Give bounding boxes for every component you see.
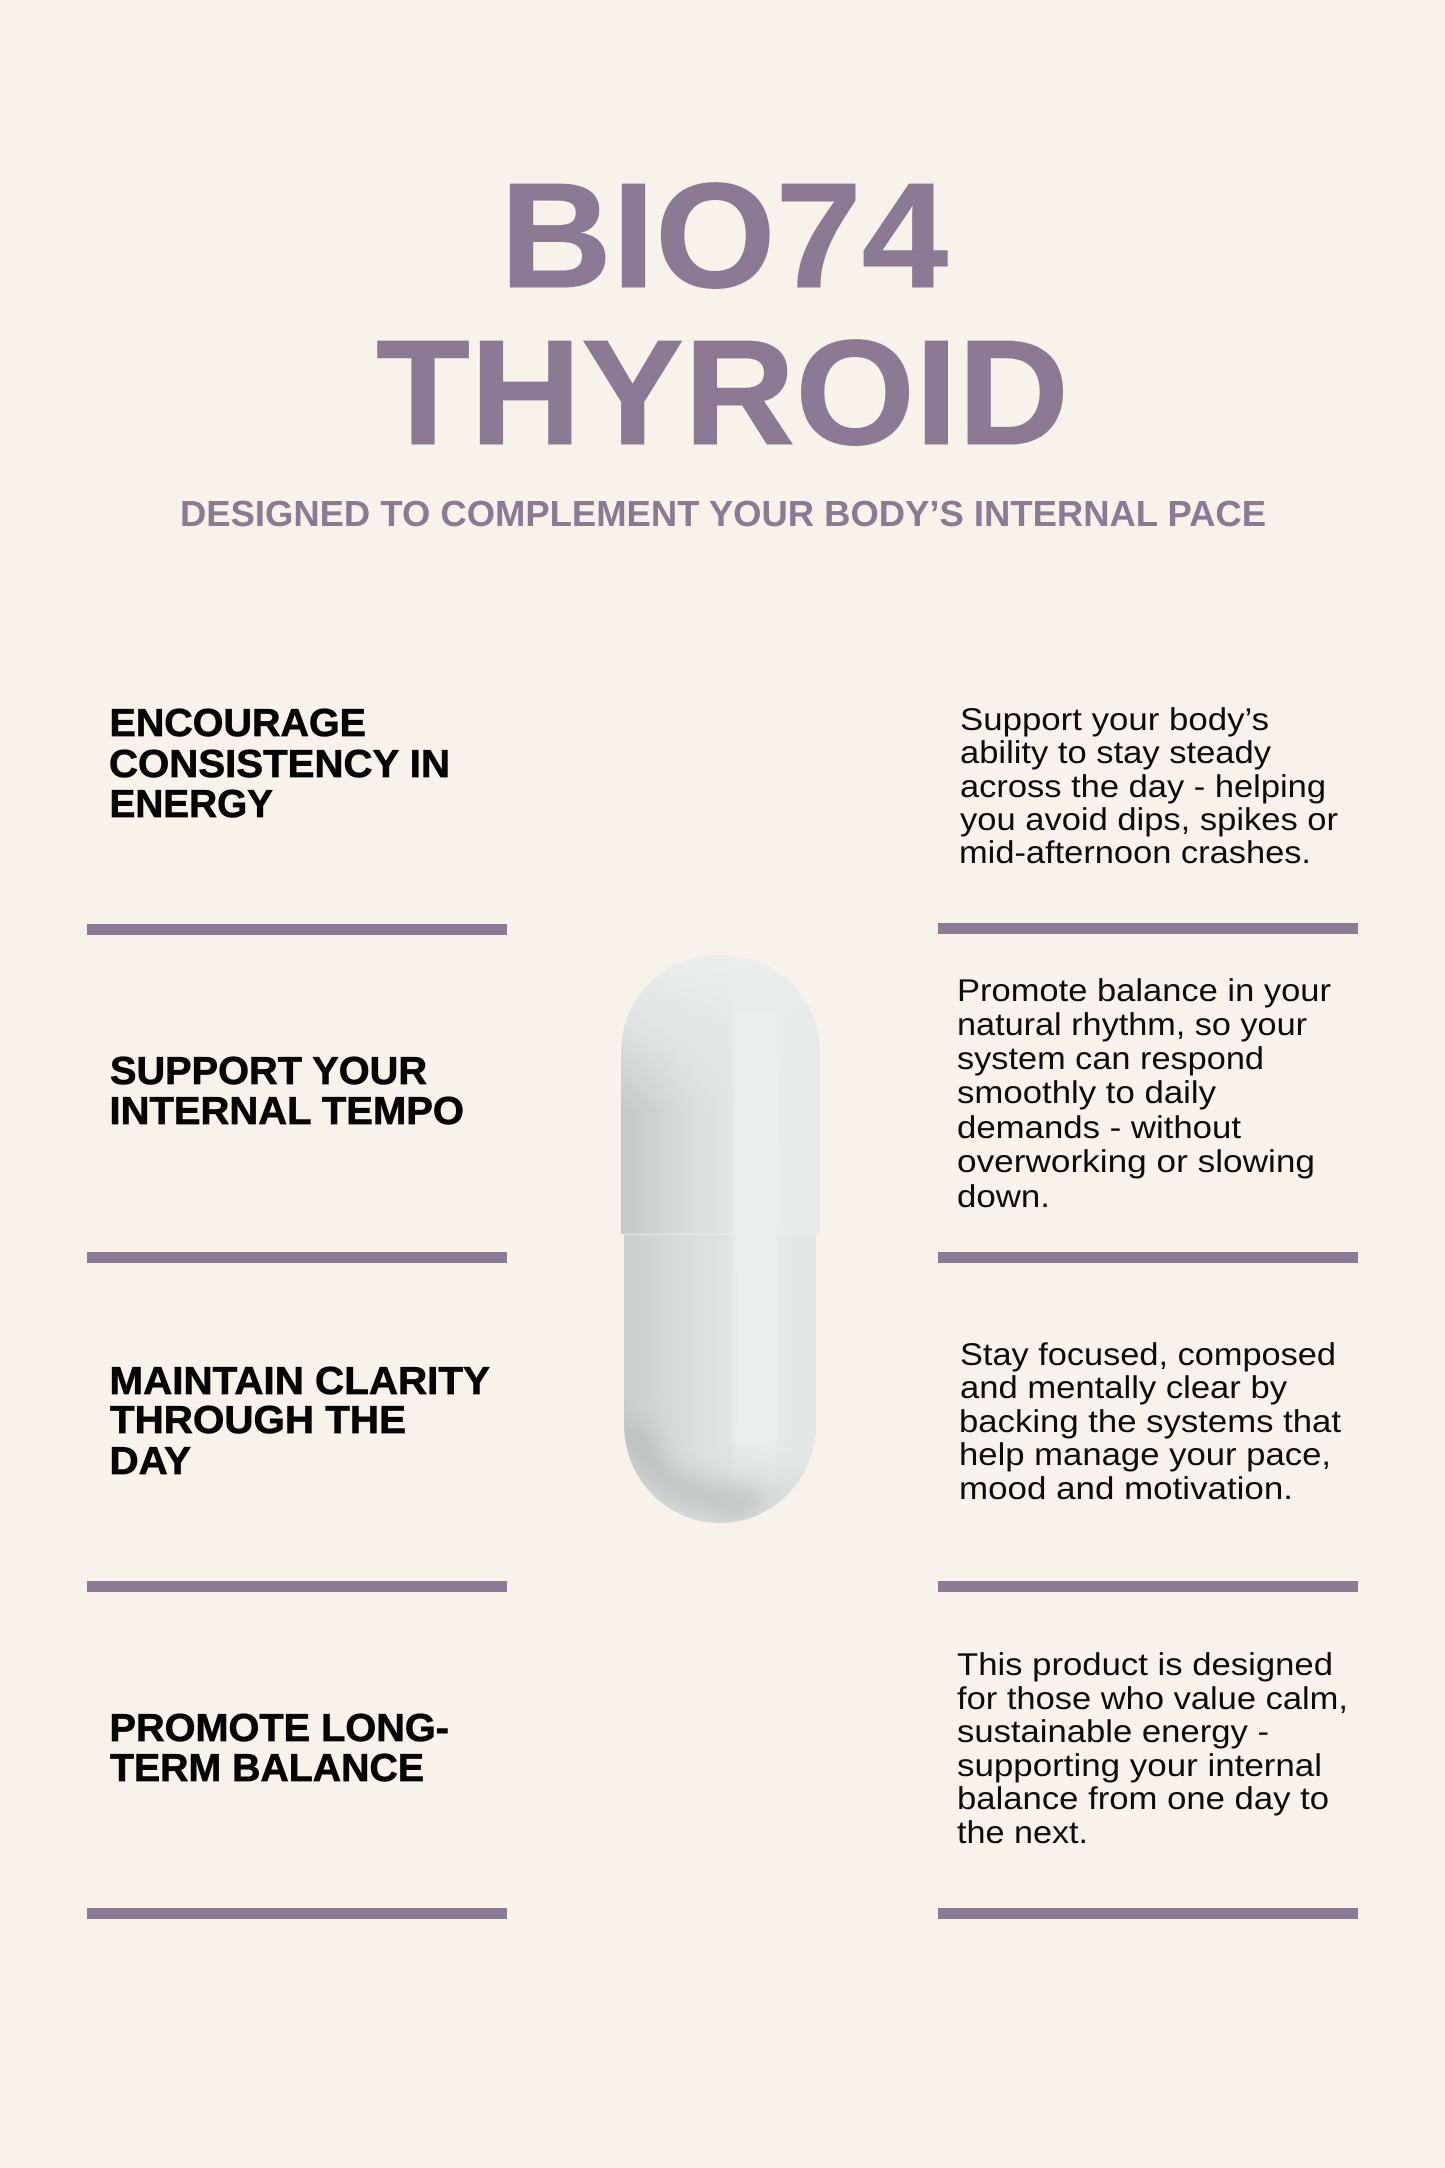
heading: maintain clarity through the day: DAY <box>110 1440 191 1483</box>
text: clarity description: help manage your pace, <box>959 1436 1331 1472</box>
text: encourage consistency description: ability to stay steady <box>960 734 1271 770</box>
text: long-term balance description: This product is designed <box>957 1646 1333 1682</box>
heading: maintain clarity through the day <box>110 1360 490 1483</box>
text: long-term balance description: sustainable energy - <box>957 1713 1269 1749</box>
heading: maintain clarity through the day: THROUGH THE <box>110 1399 406 1442</box>
text: internal tempo description: down. <box>957 1178 1050 1214</box>
text: clarity description <box>959 1336 1341 1506</box>
text: encourage consistency description: across the day - helping <box>960 768 1326 804</box>
heading: encourage consistency in energy: ENERGY <box>110 783 273 826</box>
text: encourage consistency description <box>959 701 1338 870</box>
icon: white capsule <box>620 954 821 1526</box>
title <box>376 152 1069 476</box>
text: encourage consistency description: mid-afternoon crashes. <box>959 834 1311 870</box>
subtitle: DESIGNED TO COMPLEMENT YOUR BODY’S INTERNAL PACE <box>180 493 1266 534</box>
text: long-term balance description: for those who value calm, <box>957 1680 1348 1716</box>
heading: support your internal tempo: INTERNAL TEMPO <box>110 1090 464 1133</box>
heading: encourage consistency in energy <box>109 702 450 826</box>
capsule lower body <box>620 1232 820 1526</box>
title: BIO74 <box>500 152 948 319</box>
text: internal tempo description: Promote balance in your <box>957 972 1331 1008</box>
heading: promote long-term balance <box>110 1707 449 1790</box>
text: internal tempo description: natural rhythm, so your <box>957 1006 1307 1042</box>
heading: promote long-term balance: TERM BALANCE <box>110 1747 424 1790</box>
heading: maintain clarity through the day: MAINTAIN CLARITY <box>110 1360 490 1403</box>
text: encourage consistency description: Support your body’s <box>960 701 1269 737</box>
heading: support your internal tempo: SUPPORT YOUR <box>110 1050 427 1093</box>
text: long-term balance description: the next. <box>957 1814 1088 1850</box>
heading: encourage consistency in energy: CONSISTENCY IN <box>109 743 450 786</box>
text: encourage consistency description: you avoid dips, spikes or <box>960 801 1338 837</box>
heading: promote long-term balance: PROMOTE LONG- <box>110 1707 449 1750</box>
capsule upper cap <box>620 954 821 1236</box>
text: clarity description: backing the systems that <box>959 1403 1341 1439</box>
text: internal tempo description: demands - without <box>957 1109 1241 1145</box>
text: internal tempo description: smoothly to daily <box>957 1074 1216 1110</box>
title: THYROID <box>376 309 1069 476</box>
heading: support your internal tempo <box>110 1050 464 1133</box>
heading: encourage consistency in energy: ENCOURAGE <box>110 702 366 745</box>
text: long-term balance description <box>957 1646 1348 1850</box>
text: internal tempo description: system can respond <box>957 1040 1264 1076</box>
text: internal tempo description: overworking or slowing <box>957 1143 1315 1179</box>
text: clarity description: mood and motivation. <box>959 1470 1293 1506</box>
text: clarity description: Stay focused, composed <box>960 1336 1336 1372</box>
text: internal tempo description <box>957 972 1331 1214</box>
text: clarity description: and mentally clear by <box>960 1369 1287 1405</box>
text: long-term balance description: balance from one day to <box>957 1780 1329 1816</box>
text: long-term balance description: supporting your internal <box>957 1747 1322 1783</box>
